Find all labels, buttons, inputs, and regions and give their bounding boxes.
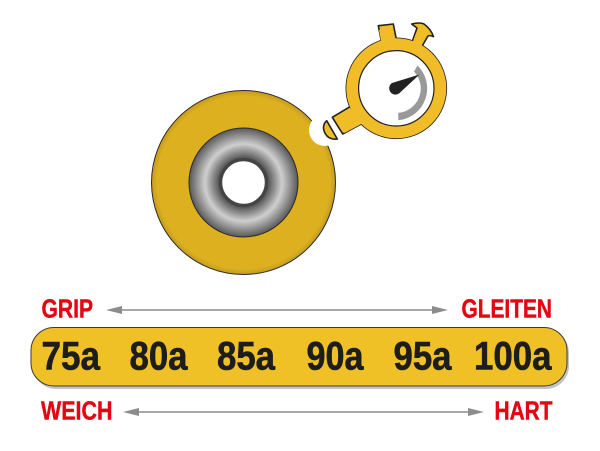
label: GLEITEN: GLEITEN: [462, 294, 552, 324]
value: 95a: 95a: [394, 334, 452, 378]
hardness scale bar: [31, 328, 569, 389]
gauge needle: [389, 74, 420, 95]
wheel: [152, 90, 341, 274]
arrow: grip to glide: [106, 306, 448, 314]
label: GRIP: GRIP: [42, 294, 93, 324]
value: 80a: 80a: [130, 334, 188, 378]
bar body: [31, 328, 567, 386]
arrow: soft to hard: [123, 408, 484, 416]
durometer gauge: [324, 23, 446, 139]
wheel hole: [220, 160, 266, 206]
wheel core: [189, 128, 298, 237]
gauge scale arc: [398, 66, 427, 120]
value: 100a: 100a: [474, 334, 552, 378]
gauge outline layer: [324, 23, 446, 139]
value: 90a: 90a: [306, 334, 364, 378]
label: HART: HART: [494, 396, 553, 426]
gauge dial: [359, 51, 434, 126]
gauge body fill: [335, 30, 446, 138]
label: WEICH: WEICH: [41, 396, 112, 426]
wheel tyre: [152, 90, 336, 274]
value: 85a: 85a: [217, 334, 276, 378]
gauge contact notch: [309, 114, 341, 146]
bar shadow: [33, 330, 569, 389]
value: 75a: 75a: [42, 334, 101, 378]
